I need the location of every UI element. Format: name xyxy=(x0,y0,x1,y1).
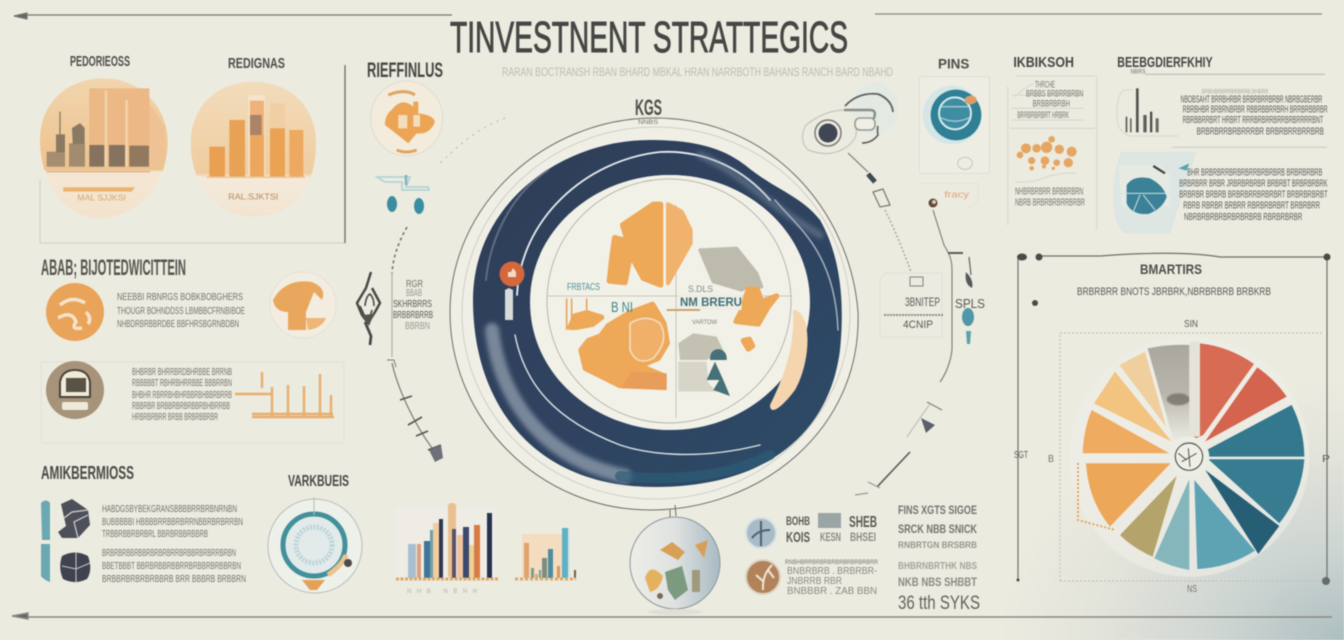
icon: disc glyph xyxy=(58,299,90,328)
ring streaks xyxy=(486,152,838,478)
card: list: BRRBRBRBRT HRBRK xyxy=(1017,110,1069,120)
text block: HRBRBRBRR BRBB BRBRBBRBR xyxy=(132,412,218,423)
right side note xyxy=(880,273,943,337)
orb illustration xyxy=(630,505,720,615)
label: pie left: SGT xyxy=(1014,449,1028,461)
icon: brown disc xyxy=(46,361,104,419)
frame dots xyxy=(1016,254,1330,585)
chart: orange sticks xyxy=(235,372,334,417)
text block: BRBBRBRBRBRBBRB BRR BBBRB BRBBRN xyxy=(102,574,246,585)
icon: dark knot xyxy=(357,272,380,345)
heading: right circle: REDIGNAS xyxy=(228,55,285,72)
inner disc xyxy=(531,175,809,429)
dotted guides xyxy=(1060,333,1323,581)
left side note: BBAB xyxy=(406,288,422,299)
card: list: BRBBRBRBH xyxy=(1033,99,1070,109)
caption block xyxy=(787,566,877,597)
panel: left charts xyxy=(40,53,345,243)
caption block: JNBRRB RBR xyxy=(787,576,842,587)
central ring diagram xyxy=(450,118,858,510)
text block: BHBRBR BHRRBRDBHRBBE BRRNB xyxy=(132,367,232,378)
right side note: 4CNIP xyxy=(903,319,933,331)
heading: notes: ABAB; BIJOTEDWICITTEIN xyxy=(41,255,186,280)
heading: ring label: KGS xyxy=(635,95,662,120)
stats block: BHBRNBRTHK NBS xyxy=(898,561,977,572)
icon: side pin head xyxy=(928,198,938,208)
text block: RBBBBBT RBHRBHRRBBE BBBRRBN xyxy=(132,378,232,389)
stats block: FINS XGTS SIGOE xyxy=(898,503,977,517)
card: list xyxy=(1008,76,1097,230)
card: list: THRCHE xyxy=(1035,79,1055,89)
card: list: BRBBS BRBRRBRBN xyxy=(1026,89,1083,99)
text block: BBETBBBT BBRBRBBRBBRRBRBBRBRBBRBN xyxy=(102,561,241,572)
left side note xyxy=(393,279,433,332)
chart: small bars xyxy=(515,528,576,579)
heading: variables: VARKBUEIS xyxy=(288,473,349,490)
card: mini chart xyxy=(1117,88,1178,136)
secondary thin ring xyxy=(462,127,850,499)
navy ring xyxy=(473,140,842,487)
bar circle left: MAL SJJKSI xyxy=(77,194,126,203)
label: small orange xyxy=(920,183,978,208)
heading: references: RIEFFINLUS xyxy=(367,59,443,82)
stats block: RNBRTGN BRSBRB xyxy=(898,540,977,550)
pie shapes xyxy=(567,204,777,396)
heading: allocations: AMIKBERMIOSS xyxy=(41,463,134,483)
top rule right xyxy=(875,13,1322,15)
inner thin circles xyxy=(547,179,791,423)
panel: allocations xyxy=(41,463,362,593)
panel: top middle-left references xyxy=(367,59,443,214)
icon: orange disc xyxy=(46,283,104,341)
row panel: performance xyxy=(41,362,344,443)
icon: teal side ornament xyxy=(955,257,985,344)
label text: fracy xyxy=(944,189,969,199)
label: pie bottom: NS xyxy=(1187,584,1197,595)
label: centre right top: S.DLS xyxy=(688,284,713,294)
figures block: BHSEI xyxy=(850,530,876,544)
vertical rule xyxy=(344,65,346,243)
pie xyxy=(1069,337,1309,577)
left side note: BRBBRBRRB xyxy=(393,309,433,321)
label: ring sub: NNBS xyxy=(638,120,658,126)
dotted caption: RNBHBRRBRBRBRBRBRBRBRBRR xyxy=(785,560,879,566)
teal bars xyxy=(41,500,50,582)
icon: dark cube top xyxy=(58,499,90,538)
stats block: NKB NBS SHBBT xyxy=(898,575,978,589)
subtitle: pie: BRBRBRR BNOTS JBRBRK,NBRBRBRB BRBKRB xyxy=(1077,286,1271,298)
card: list: NHBRBRBRR BRBBRBRN xyxy=(1015,187,1083,198)
pie side ticks xyxy=(1078,463,1115,530)
icon: eye swirl xyxy=(802,82,898,154)
subtitle: RARAN BOCTRANSH RBAN BHARD MBKAL HRAN NARRBOTH BAHANS RANCH BARD NBAHD xyxy=(502,65,893,79)
heading: pins: PINS xyxy=(938,55,969,71)
left side note: BBRBN xyxy=(405,321,430,332)
heading: ikbikson: IKBIKSOH xyxy=(1013,54,1074,71)
crosshair xyxy=(547,205,792,418)
icon: orange cluster xyxy=(1017,136,1077,171)
icon: scale xyxy=(377,175,429,214)
label: centre note: VARTOW xyxy=(692,320,717,326)
text block: THOUGR BOHNDDSS LBMBBCFRNBIBOE xyxy=(117,306,245,317)
ornament: right tick arc xyxy=(848,153,963,495)
left side note: RGR xyxy=(406,279,423,290)
chart: grouped bars xyxy=(395,503,498,595)
card: list: NBRB BRBRBRBRRBRBR xyxy=(1015,198,1085,209)
icon: brown medal xyxy=(746,560,780,594)
bar circle left xyxy=(40,78,168,218)
title: TINVESTNENT STRATTEGICS xyxy=(450,13,848,62)
top rule left xyxy=(14,13,452,19)
panel: top right xyxy=(919,54,1328,233)
caption block: BNBRBRB . BRBRBR- xyxy=(787,566,877,577)
diagram labels: FRBTACS xyxy=(567,282,600,293)
text block: TRBBRBBRBRBRL BBRBRBBRBBRB xyxy=(102,529,208,540)
icon: orange pin xyxy=(500,262,524,320)
text block: NHBDRBRBBRDBE BBFHRSBGRNBDBN xyxy=(117,319,239,330)
stats block: SRCK NBB SNICK xyxy=(898,522,977,536)
figures block: BOHB xyxy=(786,514,810,528)
rule xyxy=(1145,72,1325,76)
icon: grey medal xyxy=(746,518,776,548)
ladder end xyxy=(429,445,443,462)
left side note: SKHRBRRS xyxy=(393,298,432,310)
text block xyxy=(132,367,232,423)
figures block: SHEB xyxy=(849,514,877,531)
label: centre right box: NM BRERU xyxy=(680,295,742,309)
panel: asset notes xyxy=(41,255,344,443)
peach crescent xyxy=(770,310,808,410)
text block: NEEBBI RBNRGS BOBKBOBGHERS xyxy=(117,292,243,303)
bar circle right: RAL.SJKTSI xyxy=(228,192,278,201)
panel: pie chart xyxy=(1014,253,1330,595)
label: pie top: SIN xyxy=(1184,318,1198,330)
heading: pie: BMARTIRS xyxy=(1140,261,1202,277)
icon: teal side ornament: SPLS xyxy=(955,296,985,311)
figures block xyxy=(786,513,877,546)
text block: BUBBBBBI HBBBBRRBBRBRRNBBRBRBRRBN xyxy=(102,517,243,528)
figures block: KOIS xyxy=(786,529,810,546)
panel frame xyxy=(40,180,345,243)
icon: dark cube bottom xyxy=(60,552,90,583)
rule xyxy=(1172,145,1327,149)
figures block: KESN xyxy=(820,530,841,544)
heading: left circle: PEDORIEOSS xyxy=(70,53,130,70)
text block: BRBHBRBRRBRBRRB BHBRR xyxy=(1202,88,1268,95)
bottom rule xyxy=(12,613,1332,619)
caption block: BNBBBR . ZAB BBN xyxy=(787,586,877,597)
label: pie axis: B xyxy=(1048,454,1054,465)
icon: dial xyxy=(268,497,362,593)
outer thin ring xyxy=(450,118,858,510)
icon: orange emblem right xyxy=(270,272,336,338)
text block xyxy=(117,292,245,330)
card: globe xyxy=(919,77,989,173)
stats block xyxy=(898,503,980,614)
text block xyxy=(1181,88,1328,138)
card: teal map xyxy=(1113,152,1197,233)
bar circle right xyxy=(191,82,316,217)
text block xyxy=(1179,168,1328,223)
chart: grouped bars: NHB NBNH xyxy=(407,589,477,595)
right side note: 3BNITEP xyxy=(905,295,940,309)
stats block: 36 tth SYKS xyxy=(898,593,980,614)
heading: recommendations: BEEBGDIERFKHIY xyxy=(1117,54,1213,71)
text block xyxy=(102,504,246,585)
label: pie right: P xyxy=(1322,453,1330,465)
text block: RBBRBR BRBBRBRBRBBRBHBRRBB xyxy=(132,401,230,412)
label: sub: NBRS xyxy=(1131,69,1146,76)
text block: BHBHR RBRRBHBHRBBRBHBBRBRRB xyxy=(132,390,232,401)
chart frame xyxy=(1018,253,1327,580)
ornament: left tick arc xyxy=(387,118,505,462)
icon: orange emblem xyxy=(371,81,443,156)
text block: BRBRBRBBRBBRBRBRBRRBRBBRBRBRRBRBN xyxy=(102,548,236,559)
key figures xyxy=(746,503,980,614)
text block: HABDGSBYBEKGRANSBBBBRRBRBNRNBN xyxy=(102,504,237,515)
label: centre left: B NI xyxy=(611,299,633,316)
